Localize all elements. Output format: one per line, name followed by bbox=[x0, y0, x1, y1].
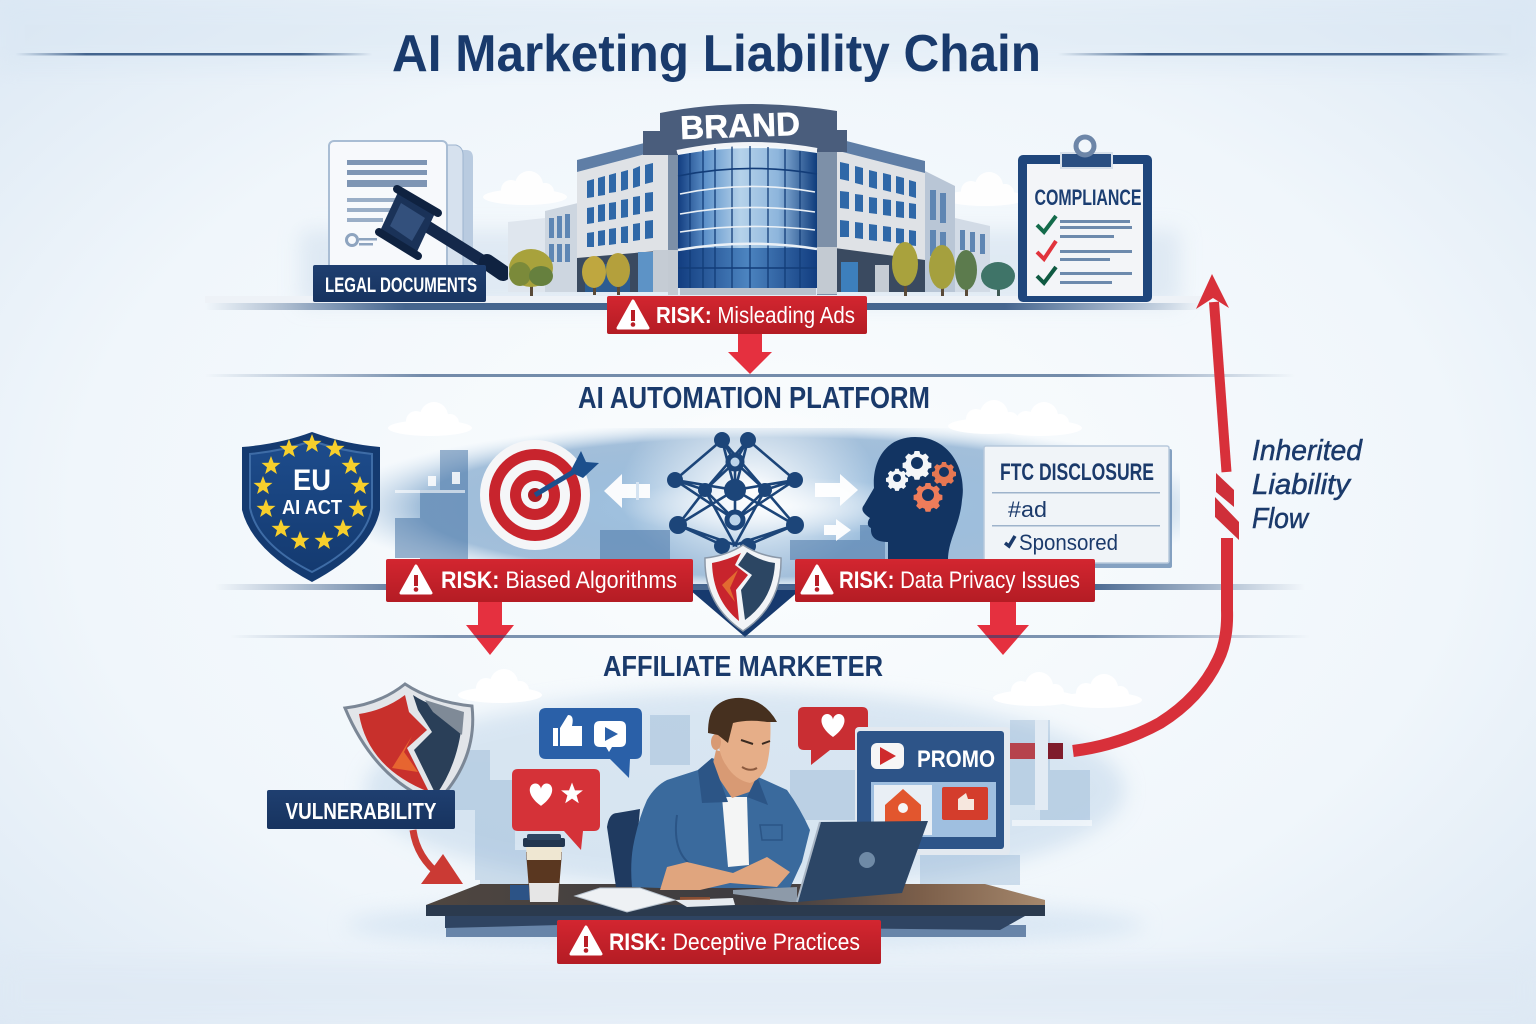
left wing bbox=[577, 137, 668, 292]
head bbox=[716, 712, 770, 783]
icon: compliance clipboard: COMPLIANCE bbox=[1034, 185, 1142, 210]
text: inherited liability flow: Inherited bbox=[1252, 435, 1363, 467]
risk badge: deceptive practices: RISK: Deceptive Practices bbox=[609, 929, 860, 956]
divider bbox=[230, 635, 1310, 638]
panel: promo screen bbox=[855, 727, 1010, 855]
risk badge: biased algorithms bbox=[386, 559, 693, 602]
arrow: data privacy to affiliate bbox=[977, 602, 1029, 655]
risk badge: data privacy issues: RISK: Data Privacy Issues bbox=[839, 567, 1080, 594]
icon: compliance clipboard bbox=[1018, 137, 1152, 302]
panel: ftc disclosure: Sponsored bbox=[1019, 530, 1118, 555]
risk badge: biased algorithms: RISK: Biased Algorithms bbox=[441, 567, 677, 594]
icon: red heart bubble bbox=[798, 707, 868, 765]
label: legal documents bbox=[313, 265, 486, 302]
risk badge: deceptive practices bbox=[557, 920, 881, 964]
risk badge: misleading ads: RISK: Misleading Ads bbox=[656, 302, 855, 328]
panel: ftc disclosure: FTC DISCLOSURE bbox=[1000, 459, 1154, 486]
panel: promo screen: PROMO bbox=[917, 746, 995, 773]
icon: broken shield bbox=[705, 545, 781, 631]
brand sign: BRAND bbox=[679, 105, 801, 146]
text: inherited liability flow: Liability bbox=[1252, 469, 1352, 501]
label: vulnerability bbox=[267, 790, 455, 829]
label: vulnerability: VULNERABILITY bbox=[286, 798, 436, 824]
arrow: biased algorithms to affiliate bbox=[466, 602, 514, 655]
icon: head with gears bbox=[862, 437, 963, 560]
icon: neural network bbox=[667, 432, 804, 554]
icon: legal documents bbox=[329, 141, 473, 271]
torso and shirt bbox=[631, 758, 810, 888]
icon: gavel bbox=[379, 189, 503, 273]
brand sign bbox=[643, 104, 847, 155]
icon: white arrows bbox=[604, 474, 858, 541]
icon: red heart star bubble bbox=[512, 769, 600, 850]
ground line bbox=[215, 584, 1305, 590]
collar bbox=[698, 758, 728, 803]
risk badge: misleading ads bbox=[607, 296, 867, 334]
neck bbox=[712, 750, 758, 798]
forearm and hand bbox=[660, 857, 790, 890]
icon: laptop bbox=[733, 821, 928, 902]
icon: blue like bubble bbox=[539, 708, 642, 778]
person bbox=[607, 698, 810, 890]
text: inherited liability flow bbox=[1252, 435, 1363, 535]
icon: target bbox=[480, 440, 599, 550]
panel: brand tier bbox=[205, 104, 1205, 374]
band background bbox=[370, 400, 1180, 586]
right wing bbox=[827, 136, 925, 292]
divider bbox=[205, 374, 1295, 377]
panel: ftc disclosure bbox=[984, 446, 1172, 568]
navy funnel behind shield bbox=[690, 590, 800, 637]
icon: notebook bbox=[575, 888, 735, 912]
icon: eu ai act shield bbox=[242, 432, 380, 582]
panel: ftc disclosure: #ad bbox=[1008, 497, 1047, 522]
icon: large broken shield bbox=[345, 684, 473, 803]
soft backdrop bbox=[300, 171, 1180, 305]
chair bbox=[607, 809, 640, 887]
heading: ai automation platform: AI AUTOMATION PLATFORM bbox=[578, 380, 930, 415]
heading: affiliate marketer: AFFILIATE MARKETER bbox=[603, 651, 883, 683]
text: inherited liability flow: Flow bbox=[1252, 503, 1310, 535]
trees bbox=[509, 242, 1015, 296]
panel: ai automation platform bbox=[215, 380, 1305, 655]
icon: eu ai act shield: AI ACT bbox=[282, 497, 342, 519]
arrow: vulnerability to desk bbox=[413, 830, 463, 884]
arrow: inherited liability flow bbox=[1010, 274, 1239, 759]
desk bbox=[426, 884, 1045, 937]
icon: coffee cup bbox=[510, 834, 565, 902]
ground line bbox=[205, 296, 1205, 310]
panel: affiliate marketer bbox=[267, 651, 1142, 964]
central glass tower bbox=[668, 135, 837, 295]
title: AI Marketing Liability Chain bbox=[392, 25, 1041, 83]
arrow: brand to platform bbox=[728, 334, 772, 374]
label: legal documents: LEGAL DOCUMENTS bbox=[325, 274, 477, 297]
scene background bbox=[365, 669, 1142, 890]
risk badge: data privacy issues bbox=[795, 559, 1095, 602]
icon: eu ai act shield: EU bbox=[293, 464, 331, 497]
icon: brand building bbox=[508, 104, 1015, 296]
far wings bbox=[508, 170, 990, 292]
